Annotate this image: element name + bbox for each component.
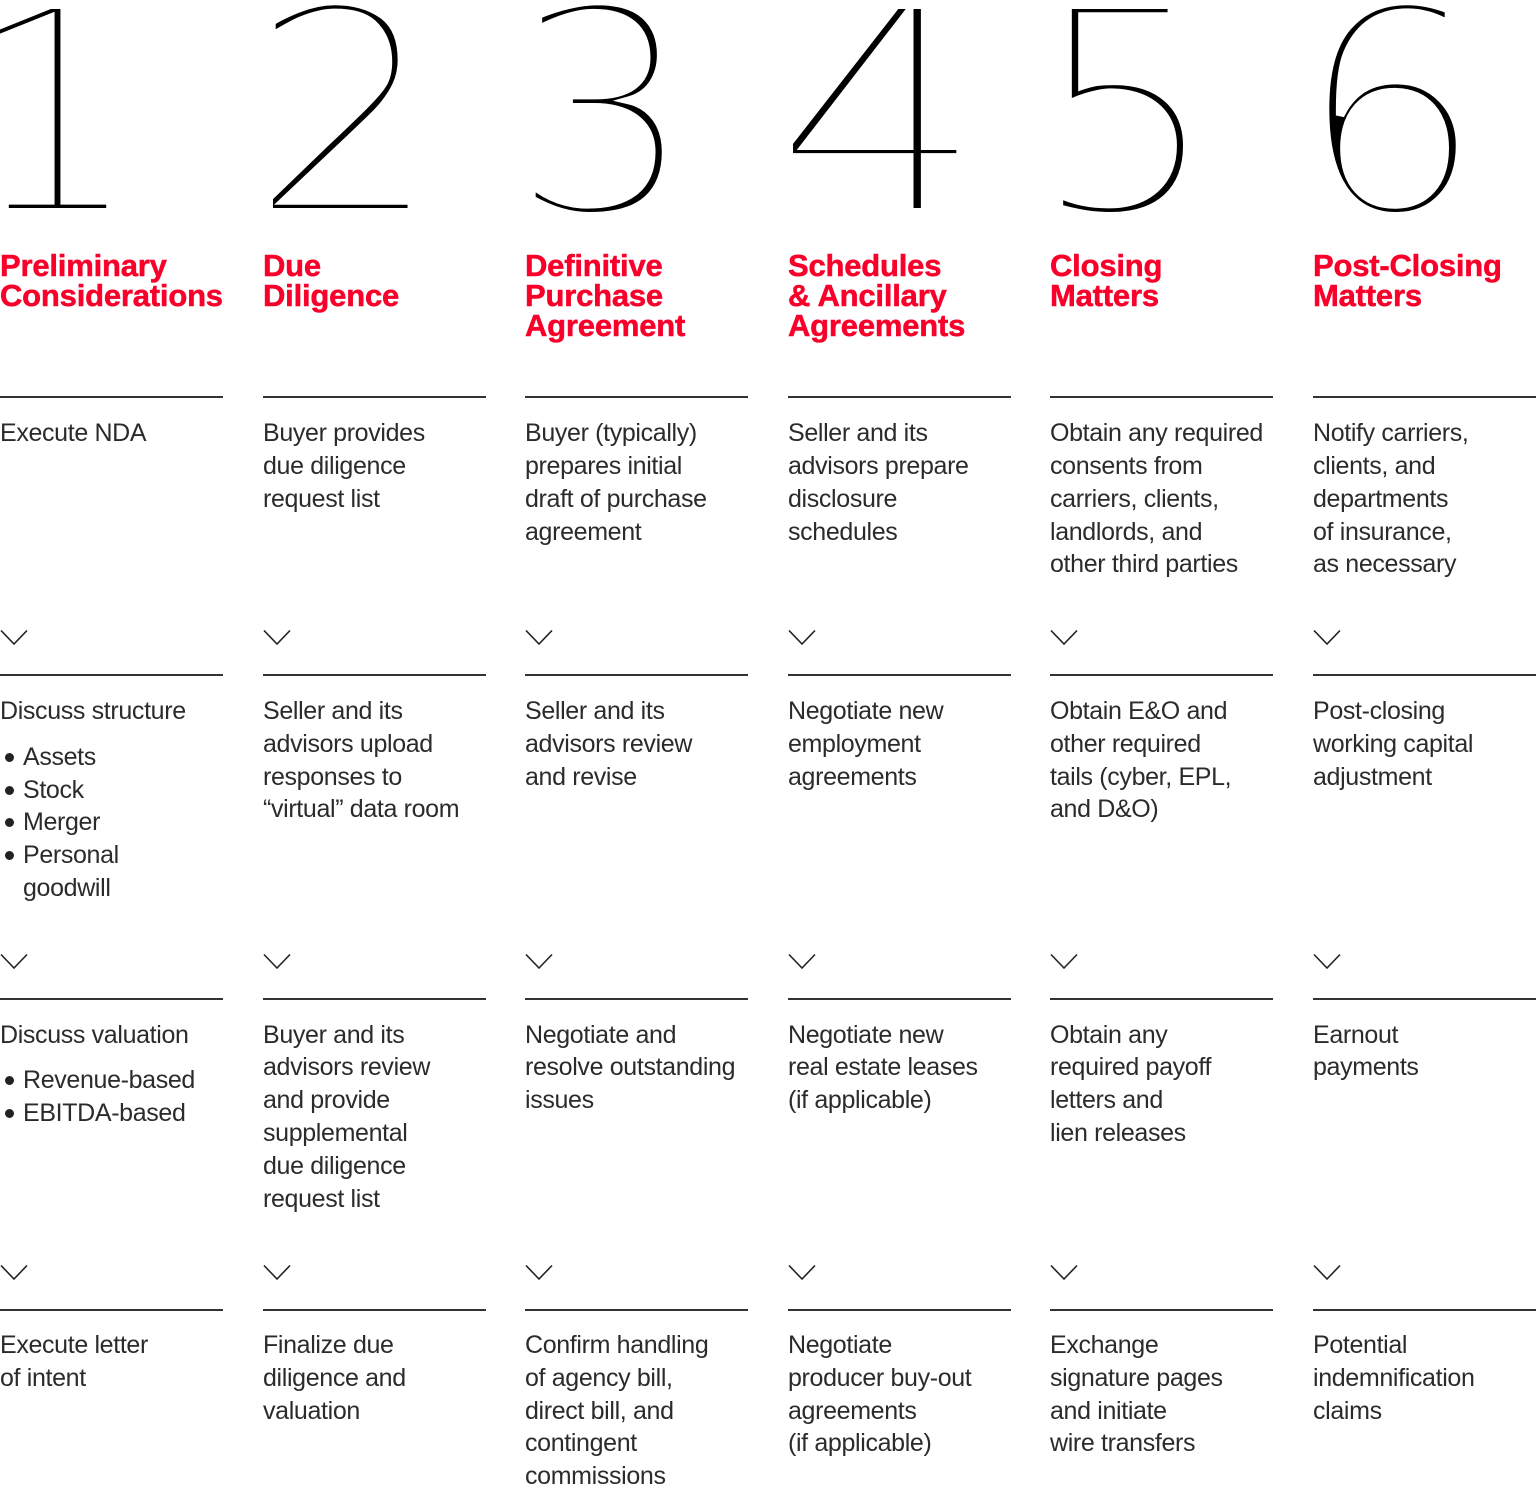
panel: column 1 preliminary considerations [0, 0, 223, 1392]
text: finalize due diligence: Finalize due [263, 1331, 394, 1359]
text: buyer provides list [263, 419, 425, 513]
text: buyer prepares draft: agreement [525, 518, 641, 546]
arrow [0, 954, 28, 969]
heading: schedules and ancillary agreements: Schedules [788, 248, 941, 282]
text: confirm handling: Confirm handling [525, 1331, 708, 1359]
text: notify carriers: as necessary [1313, 550, 1456, 578]
text: required consents: consents from [1050, 452, 1202, 480]
text: discuss structure with list: goodwill [23, 874, 111, 902]
text: producer buy-out [788, 1331, 972, 1457]
text: execute letter of intent: of intent [0, 1364, 86, 1392]
heading: preliminary considerations: Considerations [0, 278, 223, 312]
arrow [1050, 953, 1078, 970]
text: working capital: working capital [1313, 730, 1473, 758]
text: buyer reviews: supplemental [263, 1119, 408, 1147]
text: producer buy-out: Negotiate [788, 1331, 892, 1359]
text: seller uploads responses: advisors upload [263, 730, 433, 758]
text: signature pages [1050, 1329, 1285, 1460]
panel: column 5 closing matters [1029, 0, 1438, 1457]
text: earnout [1313, 1019, 1536, 1084]
text: finalize due diligence: diligence and [263, 1364, 406, 1392]
text: seller uploads responses: Seller and its [263, 697, 403, 725]
heading: definitive purchase agreement: Definitive [525, 248, 663, 282]
text: discuss structure with list: Merger [23, 808, 100, 836]
arrow [526, 954, 552, 969]
arrow [526, 630, 552, 645]
heading: schedules and ancillary agreements: Agreements [788, 308, 965, 342]
text: tails [1050, 695, 1285, 826]
heading: post-closing matters: Matters [1313, 278, 1422, 312]
text: payoff letters: required payoff [1050, 1053, 1211, 1081]
text: buyer provides list: due diligence [263, 452, 406, 480]
panel: column 2 due diligence [247, 0, 1438, 1425]
text: confirm handling: commissions [525, 1462, 666, 1490]
text: discuss valuation with list [0, 1021, 195, 1127]
text: discuss structure with list: Personal [23, 841, 119, 869]
text: disclosure schedules: disclosure [788, 485, 897, 513]
heading: closing matters: Matters [1050, 278, 1159, 312]
text: execute letter of intent [0, 1331, 148, 1392]
text: required consents: Obtain any required [1050, 419, 1263, 447]
text: indemnification: indemnification [1313, 1364, 1475, 1392]
heading: due diligence: Diligence [263, 278, 399, 312]
arrow [1050, 1264, 1078, 1281]
text: signature pages: and initiate [1050, 1397, 1167, 1425]
text: buyer prepares draft: prepares initial [525, 452, 682, 480]
arrow [264, 954, 290, 969]
text: negotiate issues: resolve outstanding [525, 1053, 735, 1081]
text: seller reviews: and revise [525, 763, 637, 791]
panel: column 6 post-closing matters [1313, 0, 1536, 1507]
arrow [0, 630, 28, 645]
arrow [0, 1265, 28, 1280]
text: required consents [1050, 417, 1285, 581]
text: confirm handling [525, 1331, 708, 1490]
text: payoff letters: letters and [1050, 1086, 1163, 1114]
text: employment agreements [788, 697, 944, 791]
panel: column 3 definitive purchase agreement [509, 0, 1438, 1490]
text: buyer prepares draft: Buyer (typically) [525, 419, 697, 447]
heading: schedules and ancillary agreements [788, 248, 965, 343]
heading: definitive purchase agreement: Agreement [525, 308, 685, 342]
arrow [1313, 1264, 1341, 1281]
arrow [1050, 629, 1078, 646]
text: real estate leases: (if applicable) [788, 1086, 931, 1114]
text: buyer reviews: due diligence [263, 1152, 406, 1180]
text: signature pages: wire transfers [1050, 1429, 1195, 1457]
text: execute letter of intent: Execute letter [0, 1331, 148, 1359]
heading: definitive purchase agreement: Purchase [525, 278, 663, 312]
text: producer buy-out: agreements [788, 1397, 917, 1425]
text: execute NDA: Execute NDA [0, 419, 146, 447]
text: discuss structure with list [0, 697, 186, 902]
text: indemnification: claims [1313, 1397, 1382, 1425]
text: discuss structure with list: Stock [23, 776, 84, 804]
arrow [1313, 629, 1341, 646]
arrow [788, 630, 816, 645]
text: buyer prepares draft: draft of purchase [525, 485, 707, 513]
heading: schedules and ancillary agreements: & Ancillary [788, 278, 947, 312]
text: negotiate issues: Negotiate and [525, 1021, 676, 1049]
heading: definitive purchase agreement [525, 248, 686, 343]
heading: closing matters [1050, 250, 1290, 310]
text: buyer provides list: Buyer provides [263, 419, 425, 447]
arrow [788, 954, 816, 969]
text: finalize due diligence: valuation [263, 1397, 360, 1425]
text: payoff letters: Obtain any [1050, 1021, 1167, 1049]
text: required consents: carriers, clients, [1050, 485, 1219, 513]
text: seller uploads responses [263, 697, 459, 823]
text: tails: and D&O) [1050, 795, 1158, 823]
text: employment agreements: agreements [788, 763, 917, 791]
text: negotiate issues [525, 1021, 735, 1114]
text: indemnification: Potential [1313, 1331, 1407, 1359]
text: payoff letters [1050, 1019, 1285, 1150]
text: producer buy-out: producer buy-out [788, 1364, 971, 1392]
text: buyer reviews: advisors review [263, 1053, 430, 1081]
text: negotiate issues: issues [525, 1086, 594, 1114]
text: working capital: adjustment [1313, 763, 1432, 791]
text: discuss structure with list: Assets [23, 743, 96, 771]
text: buyer provides list: request list [263, 485, 380, 513]
text: buyer prepares draft [525, 419, 707, 546]
text: discuss structure with list: Discuss structure [0, 697, 186, 725]
heading: preliminary considerations [0, 248, 223, 312]
text: employment agreements: employment [788, 730, 921, 758]
text: earnout: Earnout [1313, 1021, 1398, 1049]
text: disclosure schedules: Seller and its [788, 419, 928, 447]
text: seller uploads responses: responses to [263, 763, 402, 791]
text: notify carriers: clients, and [1313, 452, 1435, 480]
text: notify carriers: Notify carriers, [1313, 419, 1469, 447]
text: notify carriers: of insurance, [1313, 518, 1452, 546]
heading: post-closing matters: Post-Closing [1313, 248, 1502, 282]
heading: due diligence: Due [263, 248, 321, 282]
text: tails: tails (cyber, EPL, [1050, 763, 1231, 791]
text: signature pages: signature pages [1050, 1364, 1223, 1392]
text: real estate leases: real estate leases [788, 1053, 978, 1081]
text: producer buy-out: (if applicable) [788, 1429, 931, 1457]
text: seller reviews [525, 697, 692, 791]
text: buyer reviews: Buyer and its [263, 1021, 404, 1049]
text: notify carriers: departments [1313, 485, 1448, 513]
text: payoff letters: lien releases [1050, 1119, 1186, 1147]
text: discuss valuation with list: Discuss valuation [0, 1021, 189, 1049]
text: employment agreements: Negotiate new [788, 697, 943, 725]
text: disclosure schedules: advisors prepare [788, 452, 969, 480]
text: seller uploads responses: “virtual” data room [263, 795, 459, 823]
arrow [526, 1265, 552, 1280]
text: signature pages: Exchange [1050, 1331, 1158, 1359]
text: disclosure schedules [788, 419, 969, 546]
text: buyer reviews [263, 1021, 430, 1213]
text: required consents: other third parties [1050, 550, 1238, 578]
text: real estate leases [788, 1021, 978, 1114]
heading: closing matters: Closing [1050, 248, 1162, 282]
heading: preliminary considerations: Preliminary [0, 248, 167, 282]
text: required consents: landlords, and [1050, 518, 1202, 546]
heading: post-closing matters [1313, 250, 1536, 310]
text: discuss valuation with list: Revenue-based [23, 1066, 195, 1094]
arrow [788, 1265, 816, 1280]
text: tails: Obtain E&O and [1050, 697, 1227, 725]
text: working capital: Post-closing [1313, 697, 1445, 725]
text: notify carriers [1313, 417, 1536, 581]
text: seller reviews: Seller and its [525, 697, 665, 725]
arrow [1313, 953, 1341, 970]
text: indemnification [1313, 1329, 1536, 1427]
panel: column 4 schedules and ancillary agreements [772, 0, 1438, 1457]
text: confirm handling: of agency bill, [525, 1364, 673, 1392]
text: confirm handling: contingent [525, 1429, 637, 1457]
text: confirm handling: direct bill, and [525, 1397, 674, 1425]
text: buyer reviews: and provide [263, 1086, 390, 1114]
heading: due diligence [263, 248, 399, 313]
text: real estate leases: Negotiate new [788, 1021, 943, 1049]
text: disclosure schedules: schedules [788, 518, 897, 546]
text: buyer reviews: request list [263, 1185, 380, 1213]
text: finalize due diligence [263, 1331, 406, 1425]
arrow [264, 630, 290, 645]
text: tails: other required [1050, 730, 1201, 758]
arrow [264, 1265, 290, 1280]
text: working capital [1313, 695, 1536, 793]
text: earnout: payments [1313, 1053, 1419, 1081]
text: discuss valuation with list: EBITDA-based [23, 1099, 186, 1127]
text: seller reviews: advisors review [525, 730, 692, 758]
